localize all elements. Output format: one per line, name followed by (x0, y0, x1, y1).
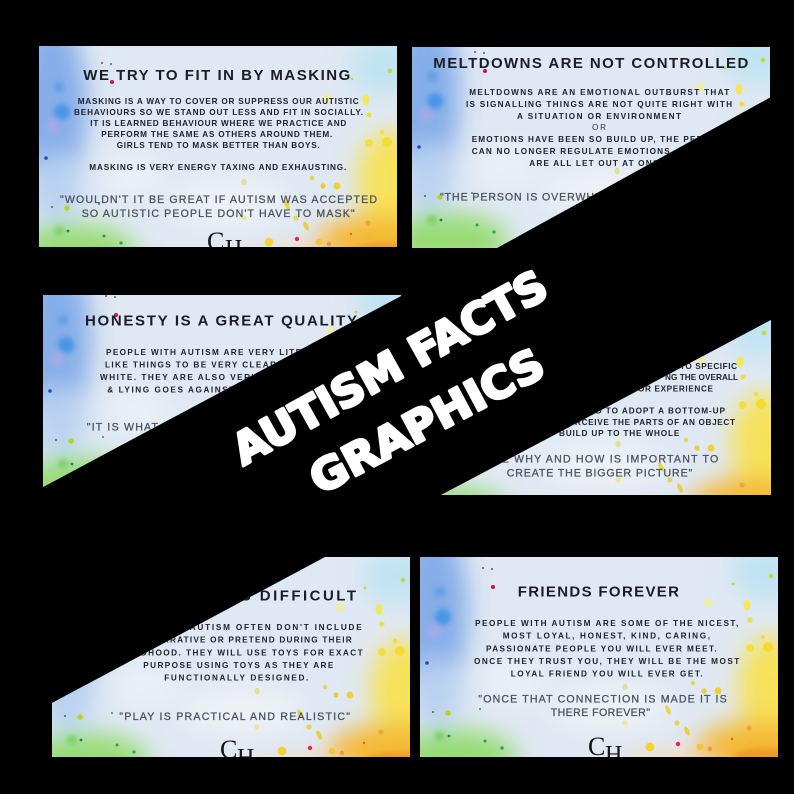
quote: play: "PLAY IS PRACTICAL AND REALISTIC" (119, 711, 350, 723)
heading: masking: WE TRY TO FIT IN BY MASKING (83, 67, 350, 84)
panel: friends forever (420, 557, 778, 757)
heading: play: IS DIFFICULT (234, 588, 356, 605)
text block: bigger picture description: TO SPECIFIC (680, 362, 737, 371)
heading: friends forever: FRIENDS FOREVER (518, 584, 679, 601)
text block: meltdowns description: OR (592, 123, 606, 132)
text block: friends description: PASSIONATE PEOPLE YOU WILL EVER MEET. (486, 644, 717, 653)
panel: meltdowns (412, 47, 770, 248)
logo: CH monogram: C (220, 735, 237, 764)
text block: play description (141, 624, 363, 680)
text block: masking description (74, 97, 363, 172)
text block: friends description: ONCE THEY TRUST YOU, THEY WILL BE THE MOST (474, 657, 739, 666)
logo: CH monogram (208, 232, 242, 247)
quote: honesty: "IT IS WHAT (87, 422, 159, 434)
text block: honesty description: LIKE THINGS TO BE VERY CLEAR (105, 360, 276, 370)
logo: CH monogram: H (225, 236, 242, 262)
text block: masking description: GIRLS TEND TO MASK BETTER THAN BOYS. (117, 141, 320, 150)
quote: meltdowns: "THE PERSON IS OVERWHELMED (440, 192, 635, 204)
logo: CH monogram: C (588, 732, 605, 761)
text block: bigger picture description: BUILD UP TO THE WHOLE (559, 429, 680, 438)
text block: meltdowns description: CAN NO LONGER REGULATE EMOTIONS (472, 147, 670, 156)
title: Autism Facts Graphics: GRAPHICS (302, 339, 553, 505)
logo: CH monogram: H (605, 742, 622, 768)
panel: bigger picture (441, 320, 771, 495)
text block: play description: FUNCTIONALLY DESIGNED. (164, 674, 308, 683)
quote: masking: SO AUTISTIC PEOPLE DON'T HAVE TO MASK" (82, 208, 355, 220)
quote: masking (60, 195, 377, 218)
text block: meltdowns description: ARE ALL LET OUT AT ONCE (529, 159, 666, 168)
text block: masking description: PERFORM THE SAME AS OTHERS AROUND THEM. (101, 130, 332, 139)
text block: play description: NARRATIVE OR PRETEND DURING THEIR (149, 636, 352, 645)
text block: play description: PURPOSE USING TOYS AS THEY ARE (143, 661, 334, 670)
quote: friends: "ONCE THAT CONNECTION IS MADE IT IS (478, 693, 727, 705)
heading: meltdowns: MELTDOWNS ARE NOT CONTROLLED (433, 55, 748, 72)
text block: bigger picture description: D TO ADOPT A BOTTOM-UP (596, 407, 726, 416)
text block: meltdowns description: IS SIGNALLING THINGS ARE NOT QUITE RIGHT WITH (466, 100, 732, 109)
text block: meltdowns description: MELTDOWNS ARE AN EMOTIONAL OUTBURST THAT (469, 88, 729, 97)
text block: masking description: MASKING IS VERY ENERGY TAXING AND EXHAUSTING. (89, 163, 346, 172)
text block: honesty description: WHITE. THEY ARE ALSO VERY (100, 373, 257, 382)
quote: bigger picture: CREATE THE BIGGER PICTURE" (507, 468, 693, 480)
quote: masking: "WOULDN'T IT BE GREAT IF AUTISM WAS ACCEPTED (60, 194, 377, 206)
logo: CH monogram: H (237, 745, 254, 771)
text block: play description: CHILDHOOD. THEY WILL USE TOYS FOR EXACT (116, 648, 363, 657)
logo: CH monogram (221, 740, 254, 757)
text block: meltdowns description (466, 88, 732, 168)
text block: friends description (474, 619, 739, 679)
text block: honesty description: & LYING GOES AGAINST (107, 386, 234, 394)
quote: bigger picture: THE WHY AND HOW IS IMPORTANT TO (485, 454, 718, 466)
text block: honesty description: PEOPLE WITH AUTISM ARE VERY LITERAL (106, 348, 322, 357)
panel: masking (39, 46, 397, 247)
quote: bigger picture (502, 454, 718, 477)
text block: masking description: IT IS LEARNED BEHAVIOUR WHERE WE PRACTICE AND (90, 119, 346, 128)
text block: friends description: PEOPLE WITH AUTISM ARE SOME OF THE NICEST, (475, 619, 738, 628)
title: Autism Facts Graphics: AUTISM FACTS (224, 261, 556, 476)
logo: CH monogram: C (207, 227, 224, 256)
text block: bigger picture description: NG THE OVERALL (665, 373, 738, 382)
text block: meltdowns description: EMOTIONS HAVE BEEN SO BUILD UP, THE PERSON (472, 135, 724, 144)
quote: friends: THERE FOREVER" (551, 707, 650, 719)
logo: CH monogram (589, 738, 622, 757)
text block: play description: AUTISM OFTEN DON'T INCLUDE (190, 623, 362, 632)
text block: bigger picture description (559, 362, 738, 438)
text block: bigger picture description: RCEIVE THE PARTS OF AN OBJECT (575, 418, 735, 427)
panel: honesty (43, 295, 401, 487)
text block: friends description: LOYAL FRIEND YOU WILL EVER GET. (511, 670, 703, 679)
heading: honesty: HONESTY IS A GREAT QUALITY (85, 313, 357, 330)
text block: friends description: MOST LOYAL, HONEST, KIND, CARING, (503, 632, 710, 641)
text block: bigger picture description: OR EXPERIENCE (638, 385, 714, 394)
text block: masking description: MASKING IS A WAY TO COVER OR SUPPRESS OUR AUTISTIC (78, 97, 359, 106)
panel: play (52, 557, 410, 757)
quote: friends (478, 694, 726, 716)
text block: masking description: BEHAVIOURS SO WE STAND OUT LESS AND FIT IN SOCIALLY. (74, 108, 363, 117)
text block: honesty description (100, 349, 301, 392)
text block: meltdowns description: A SITUATION OR ENVIRONMENT (517, 112, 681, 121)
